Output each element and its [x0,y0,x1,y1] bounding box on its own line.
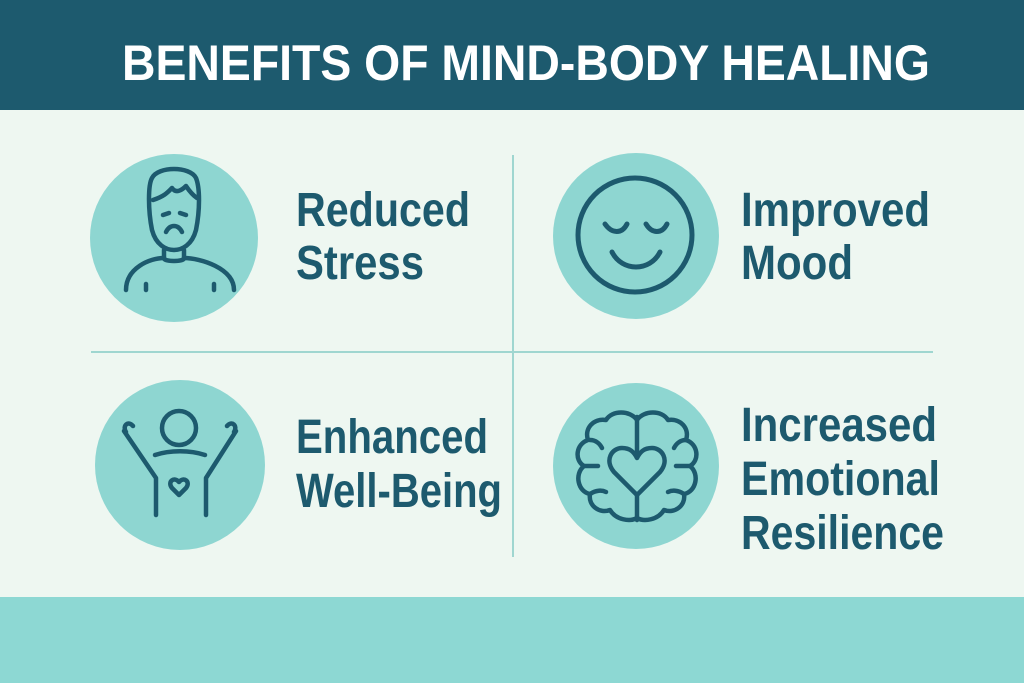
panel: emotional resilience [553,383,944,560]
label: enhanced well-being [296,411,502,518]
header bar [0,0,1024,110]
label: reduced stress [296,184,470,290]
icon: brain with heart [553,383,719,549]
label: increased emotional resilience: Increased [741,399,937,452]
label: increased emotional resilience [741,399,944,560]
label: improved mood: Mood [741,237,853,290]
icon: person with raised arms [95,380,265,550]
title: BENEFITS OF MIND-BODY HEALING [122,35,930,91]
label: reduced stress: Reduced [296,184,470,237]
label: improved mood: Improved [741,184,930,237]
label: enhanced well-being: Enhanced [296,411,488,464]
footer band [0,597,1024,683]
panel: reduced stress [90,154,470,322]
label: increased emotional resilience: Resilience [741,507,944,560]
label: enhanced well-being: Well-Being [296,465,502,518]
panel: improved mood [553,153,930,319]
label: reduced stress: Stress [296,237,424,290]
label: increased emotional resilience: Emotional [741,453,940,506]
icon: stressed person [90,154,258,322]
icon: calm face [553,153,719,319]
label: improved mood [741,184,930,290]
panel: enhanced well-being [95,380,502,550]
